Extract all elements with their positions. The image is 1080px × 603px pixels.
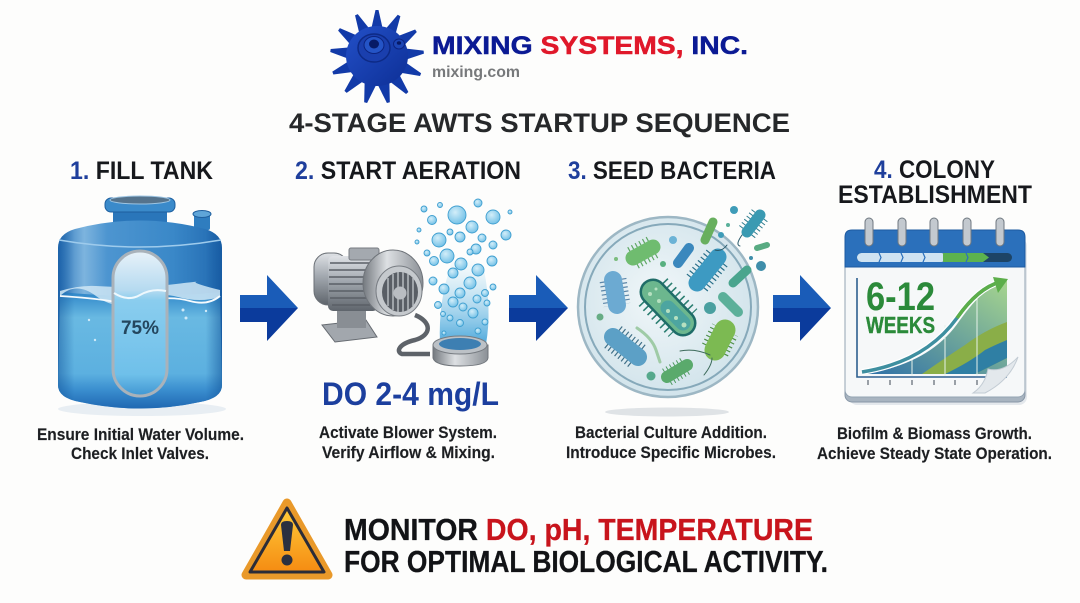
smaller bacteria <box>613 215 767 377</box>
page curl <box>973 357 1018 393</box>
panel: stage 3 seed bacteria <box>566 157 776 462</box>
description: stage 3 <box>566 423 776 462</box>
arrow: stage 2 to 3 <box>509 275 568 341</box>
heading: stage 1: 1. FILL TANK <box>70 157 213 185</box>
heading: stage 4: 4. COLONY <box>874 156 995 184</box>
bubbles <box>415 199 512 344</box>
duration value: 6-12 <box>866 275 935 319</box>
icon: blue mixing gear <box>330 10 424 104</box>
air diffuser <box>433 345 488 366</box>
description: stage 4: Achieve Steady State Operation. <box>817 444 1052 463</box>
title: 4-STAGE AWTS STARTUP SEQUENCE <box>289 108 790 138</box>
description: stage 2 <box>319 423 497 462</box>
panel: stage 2 start aeration <box>295 157 521 462</box>
arrow: stage 1 to 2 <box>240 275 298 341</box>
logo <box>330 10 748 104</box>
duration unit: WEEKS <box>866 312 935 338</box>
calendar rings <box>865 218 1004 246</box>
description: stage 2: Activate Blower System. <box>319 423 497 442</box>
description: stage 2: Verify Airflow & Mixing. <box>322 443 495 462</box>
company name: MIXING SYSTEMS, INC. <box>432 32 748 60</box>
motor body <box>314 253 348 305</box>
heading: stage 4: ESTABLISHMENT <box>838 181 1032 209</box>
progress bar <box>857 253 1012 262</box>
callout: monitoring reminder <box>246 503 828 579</box>
hose <box>399 315 430 354</box>
callout line 2: FOR OPTIMAL BIOLOGICAL ACTIVITY. <box>344 544 828 579</box>
motor base <box>322 320 377 342</box>
description: stage 4: Biofilm & Biomass Growth. <box>837 424 1032 443</box>
heading: stage 2: 2. START AERATION <box>295 157 521 185</box>
growth chart <box>857 277 1008 385</box>
panel: stage 4 colony establishment <box>817 156 1052 463</box>
large central bacterium <box>648 288 686 328</box>
tank level label: 75% <box>121 318 159 339</box>
icon: warning triangle <box>246 503 328 575</box>
floating dots <box>596 206 766 380</box>
icon: growth calendar <box>845 218 1027 405</box>
description: stage 3: Introduce Specific Microbes. <box>566 443 776 462</box>
description: stage 4 <box>817 424 1052 463</box>
icon: petri dish with bacteria <box>578 206 767 416</box>
motor face <box>363 250 423 316</box>
arrow: stage 3 to 4 <box>773 275 831 341</box>
description: stage 1: Check Inlet Valves. <box>71 444 209 463</box>
panel: stage 1 fill tank <box>37 157 244 463</box>
callout line 1: MONITOR DO, pH, TEMPERATURE <box>344 512 813 547</box>
icon: water tank at 75 percent <box>58 196 226 416</box>
heading: stage 4 <box>838 156 1032 209</box>
dissolved oxygen value: DO 2-4 mg/L <box>322 376 499 412</box>
description: stage 1 <box>37 425 244 463</box>
website: mixing.com <box>432 64 520 81</box>
description: stage 1: Ensure Initial Water Volume. <box>37 425 244 444</box>
description: stage 3: Bacterial Culture Addition. <box>575 423 767 442</box>
heading: stage 3: 3. SEED BACTERIA <box>568 157 776 185</box>
icon: blower with air diffuser <box>314 199 512 366</box>
